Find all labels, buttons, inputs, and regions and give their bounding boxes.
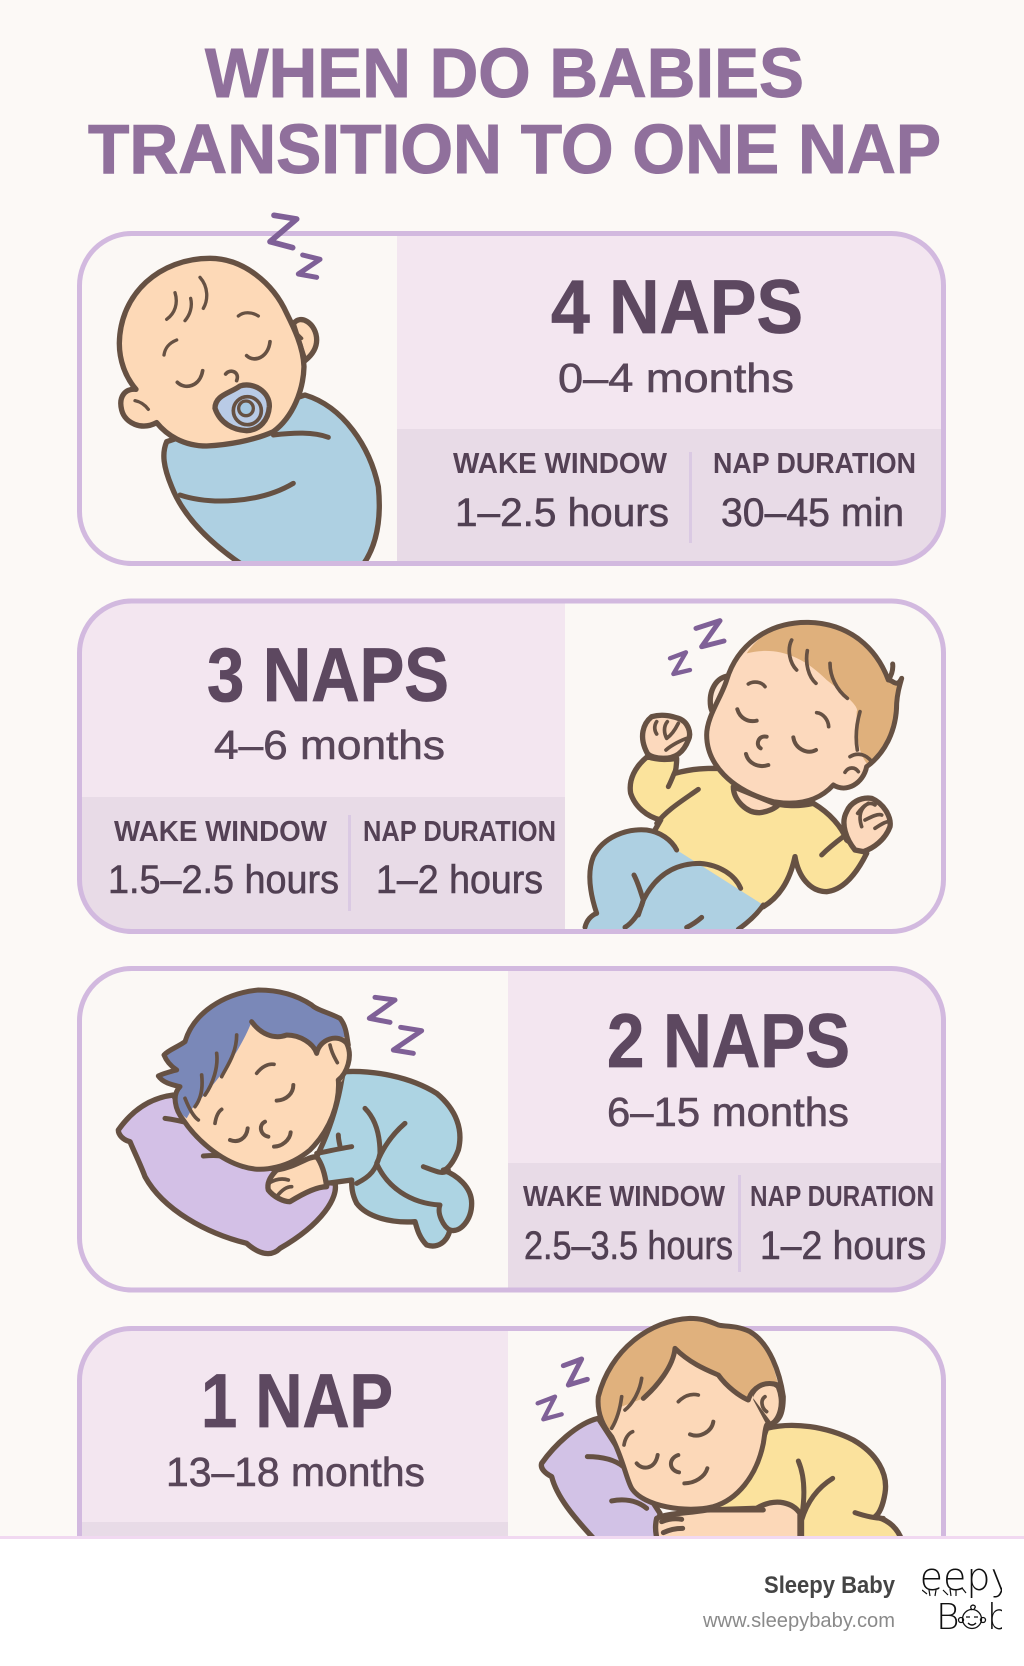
panel: 1 nap card [77,1316,946,1536]
stat: nap duration: 30–45 min [721,491,904,535]
footer brand name: Sleepy Baby [764,1572,896,1599]
logo: clipped sleepy baby mark: B [936,1597,960,1638]
stat: wake window [523,1181,733,1268]
stat: wake window: 1–2.5 hours [455,491,669,535]
stat: wake window: WAKE WINDOW [114,816,328,848]
card border [80,601,944,932]
stat: nap duration: NAP DURATION [750,1181,934,1213]
stat: nap duration: 1–2 hours [760,1224,926,1268]
illustration: baby on back in yellow shirt [585,622,902,933]
stat: nap duration: NAP DURATION [363,816,556,848]
heading: 2 naps: 2 NAPS [607,999,850,1084]
heading: 3 naps: 3 NAPS [207,633,449,718]
card border [80,1328,944,1658]
age range: 4–6 months [214,722,445,768]
footer website: www.sleepybaby.com [702,1610,895,1632]
icon: sleeping z marks [369,997,422,1053]
footer [0,1536,1024,1666]
stat: wake window [453,448,669,535]
icon: sleeping z marks [670,621,724,674]
icon: sleeping z marks [270,215,320,277]
stat: nap duration: NAP DURATION [713,448,916,480]
stat: wake window: WAKE WINDOW [523,1181,726,1213]
stat: wake window: WAKE WINDOW [453,448,668,480]
panel: 3 naps card [77,600,947,934]
stat: nap duration [750,1181,934,1268]
heading: 4 naps: 4 NAPS [551,265,803,350]
stat: wake window: 2.5–3.5 hours [524,1224,733,1268]
title: WHEN DO BABIES [205,34,804,112]
stat: nap duration: 1–2 hours [376,858,543,902]
title [88,34,941,188]
logo: clipped sleepy baby mark [922,1568,1002,1630]
stat: nap duration [363,816,556,902]
panel: 2 naps card [77,967,948,1293]
logo: clipped sleepy baby mark: Sleepy [885,1555,1013,1599]
icon: baby face [958,1605,986,1628]
age range: 13–18 months [166,1449,425,1495]
card border [80,968,944,1290]
stat: nap duration [713,448,916,535]
title: TRANSITION TO ONE NAP [88,110,941,188]
heading: 1 nap: 1 NAP [201,1359,393,1444]
illustration: swaddled baby with pacifier [119,258,379,567]
panel: 4 naps card [79,215,947,567]
age range: 0–4 months [558,355,794,401]
stat: wake window [108,816,339,902]
illustration: blue-haired baby on pillow [118,990,472,1254]
age range: 6–15 months [607,1089,849,1135]
stat: wake window: 1.5–2.5 hours [108,858,339,902]
icon: sleeping z marks [538,1359,587,1419]
illustration: baby on pillow in yellow shirt [538,1318,902,1543]
card border [80,234,944,564]
